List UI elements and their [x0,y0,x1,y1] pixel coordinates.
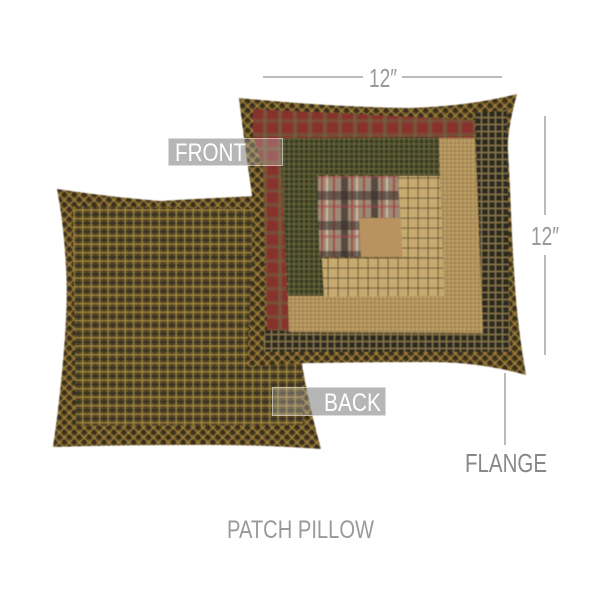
cream check right patch [398,176,443,257]
back pillow [53,189,321,449]
label base: BACK [272,387,386,416]
plaid top patch [317,176,400,218]
front pillow [239,94,526,375]
dark green strip [280,137,439,296]
callout: flange: FLANGE [465,448,547,478]
navy check strip [262,110,510,352]
dimension: height 12 inches: 12″ [531,221,559,251]
back pillow flange [53,189,321,449]
back pillow fabric panel [73,206,303,426]
dimension: width 12 inches: 12″ [369,63,397,93]
front pillow flange [239,94,526,375]
centre tan patch [359,218,402,257]
callout: flange [465,373,547,478]
label: BACK: BACK [324,389,381,417]
red plaid strip [253,109,475,331]
cream check bottom patch [322,257,444,297]
title: product name: PATCH PILLOW [227,516,374,544]
label: FRONT: FRONT [175,139,246,167]
label: BACK [272,388,386,417]
plaid small patch [318,217,361,257]
label base: FRONT [168,138,283,166]
large tan strip [288,138,483,333]
